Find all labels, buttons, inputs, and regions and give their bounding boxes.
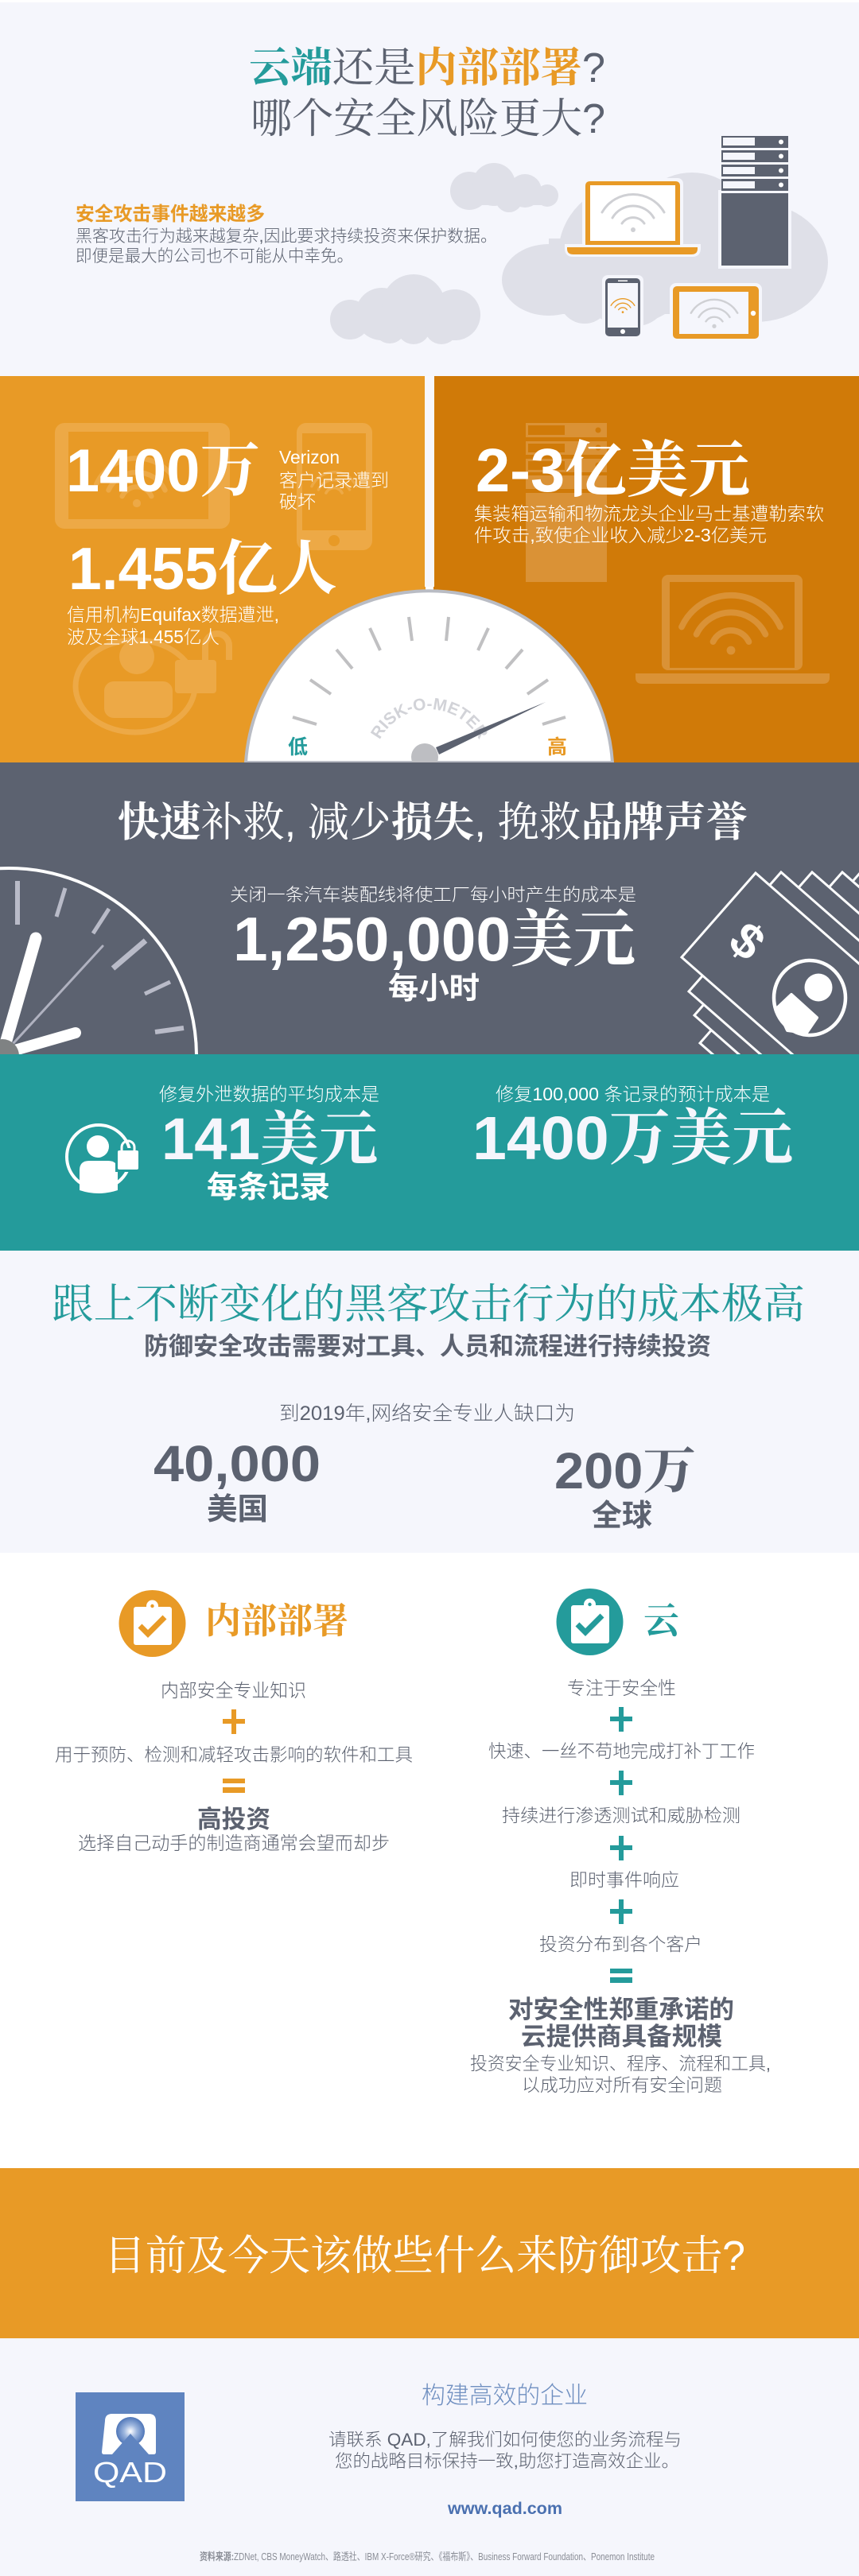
item: 用于预防、检测和减轻攻击影响的软件和工具 (55, 1745, 413, 1765)
heading: 跟上不断变化的黑客攻击行为的成本极高 (52, 1282, 805, 1328)
cost text block (230, 885, 636, 1006)
icon: equals (610, 1969, 632, 1983)
result: 高投资 (197, 1806, 270, 1833)
panel: dark orange right stats (433, 376, 859, 762)
panel: talent shortage (0, 1251, 859, 1553)
contact text: 您的战略目标保持一致,助您打造高效企业。 (335, 2451, 679, 2471)
item: 快速、一丝不苟地完成打补丁工作 (488, 1741, 755, 1762)
panel: call to action banner (0, 2168, 859, 2338)
stat: global (554, 1442, 696, 1533)
item: 专注于安全性 (567, 1678, 676, 1698)
stat: 145.5 million people: 1.455亿人 (68, 535, 337, 602)
icon: ghost person with lock (76, 634, 229, 732)
icon: tablet (670, 283, 762, 342)
panel: comparison (0, 1553, 859, 2168)
stat: 200-300 million dollars (474, 436, 824, 545)
icon: plus (610, 1836, 632, 1860)
result note: 投资安全专业知识、程序、流程和工具, (470, 2054, 771, 2074)
icon: teal clipboard (557, 1589, 624, 1655)
icon: equals (223, 1779, 245, 1793)
column: on-premises (55, 1590, 413, 1853)
icon: person with lock (67, 1125, 141, 1193)
title: 哪个安全风险更大? (251, 96, 605, 142)
item: 持续进行渗透测试和威胁检测 (502, 1806, 740, 1825)
column: cloud (470, 1589, 771, 2096)
result note (470, 2054, 771, 2096)
gauge: risk-o-meter: RISK-O-METER (371, 698, 487, 739)
cost text block: 每小时 (388, 972, 480, 1006)
item: 投资分布到各个客户 (539, 1935, 702, 1954)
title: 云端还是内部部署? (249, 45, 605, 91)
stat: 14 million records (66, 437, 389, 512)
result note: 选择自己动手的制造商通常会望而却步 (78, 1833, 390, 1853)
panel: breach repair cost (0, 1054, 859, 1251)
stat: 100000 records: 修复100,000 条记录的预计成本是 (496, 1084, 770, 1104)
icon: laptop (565, 178, 701, 257)
gauge: risk-o-meter: 高 (547, 736, 567, 758)
stat: 14 million records: 1400万 (66, 437, 260, 505)
shortage lead-in: 到2019年,网络安全专业人缺口为 (279, 1402, 575, 1425)
result (508, 1995, 734, 2050)
intro text block: 黑客攻击行为越来越复杂,因此要求持续投资来保护数据。 (76, 227, 497, 246)
icon: QAD logo: QAD (93, 2456, 167, 2489)
gauge: risk-o-meter: 低 (288, 736, 308, 758)
icon: money stack (680, 870, 859, 1054)
icon: small cloud bottom (330, 274, 480, 344)
heading: 云 (643, 1600, 682, 1641)
stat: per record: 141美元 (161, 1106, 378, 1172)
cost text block: 1,250,000美元 (233, 904, 636, 974)
item: 内部安全专业知识 (161, 1680, 306, 1701)
icon: orange clipboard (119, 1590, 186, 1657)
intro text block: 即便是最大的公司也不可能从中幸免。 (76, 247, 353, 266)
stat: 14 million records: 客户记录遭到 (279, 470, 389, 491)
stat: per record: 每条记录 (207, 1171, 330, 1205)
panel: intro (0, 2, 859, 376)
panel: orange left stats (0, 376, 426, 762)
stat: 145.5 million people: 信用机构Equifax数据遭泄, (67, 604, 279, 625)
stat: 200-300 million dollars: 集装箱运输和物流龙头企业马士基遭勒索软 (474, 503, 824, 524)
icon: plus (610, 1899, 632, 1924)
intro text block (76, 204, 497, 266)
icon: QAD logo (76, 2392, 185, 2501)
result: 云提供商具备规模 (521, 2022, 722, 2050)
icon: plus (223, 1709, 245, 1734)
icon: server (718, 136, 791, 269)
stat: 100000 records: 1400万美元 (472, 1104, 793, 1173)
sources: 资料来源:ZDNet, CBS MoneyWatch、路透社、IBM X-Force®研究、《福布斯》、Business Forward Foundation、Ponemon Institute (200, 2551, 655, 2562)
gauge: risk-o-meter (244, 589, 614, 762)
result note: 以成功应对所有安全问题 (522, 2075, 722, 2096)
icon: small cloud top (450, 163, 558, 212)
stat: US (154, 1435, 321, 1527)
stat: 14 million records: 破坏 (279, 491, 316, 512)
icon: large cloud (502, 173, 828, 326)
stat: 14 million records: Verizon (279, 447, 340, 467)
icon: plus (610, 1771, 632, 1795)
intro text block: 安全攻击事件越来越多 (76, 204, 265, 225)
stat: US: 40,000 (154, 1435, 321, 1492)
cost text block: 关闭一条汽车装配线将使工厂每小时产生的成本是 (230, 885, 636, 905)
icon: clock (0, 867, 198, 1054)
contact text: 请联系 QAD,了解我们如何使您的业务流程与 (328, 2430, 682, 2450)
icon: phone (602, 275, 643, 339)
stat: global: 200万 (554, 1442, 696, 1499)
gap between orange panels (425, 376, 434, 587)
stat: global: 全球 (592, 1499, 652, 1533)
website: www.qad.com (447, 2500, 562, 2518)
icon: ghost phone (297, 423, 372, 550)
footer heading: 构建高效的企业 (422, 2383, 588, 2409)
title (249, 45, 605, 142)
stat: 145.5 million people: 波及全球1.455亿人 (67, 627, 220, 647)
icon: plus (610, 1707, 632, 1732)
stat: per record: 修复外泄数据的平均成本是 (159, 1084, 379, 1104)
panel: footer (0, 2338, 859, 2576)
item: 即时事件响应 (569, 1870, 679, 1891)
stat: US: 美国 (207, 1493, 268, 1527)
icon: ghost server (526, 423, 607, 582)
subheading: 防御安全攻击需要对工具、人员和流程进行持续投资 (144, 1333, 711, 1360)
panel: downtime cost (0, 762, 859, 1054)
stat: per record (159, 1084, 379, 1205)
icon: money stack: $ (719, 912, 775, 972)
stat: 200-300 million dollars: 2-3亿美元 (476, 436, 750, 505)
contact text (328, 2430, 682, 2471)
heading: 快速补救, 减少损失, 挽救品牌声誉 (118, 800, 748, 846)
icon: ghost laptop (636, 575, 830, 684)
heading: 目前及今天该做些什么来防御攻击? (104, 2233, 745, 2279)
stat: 200-300 million dollars: 件攻击,致使企业收入减少2-3亿美元 (474, 525, 767, 545)
icon: ghost tablet (55, 423, 230, 529)
heading: 内部部署 (205, 1600, 348, 1641)
stat: 145.5 million people (67, 535, 337, 647)
result: 对安全性郑重承诺的 (508, 1995, 734, 2023)
